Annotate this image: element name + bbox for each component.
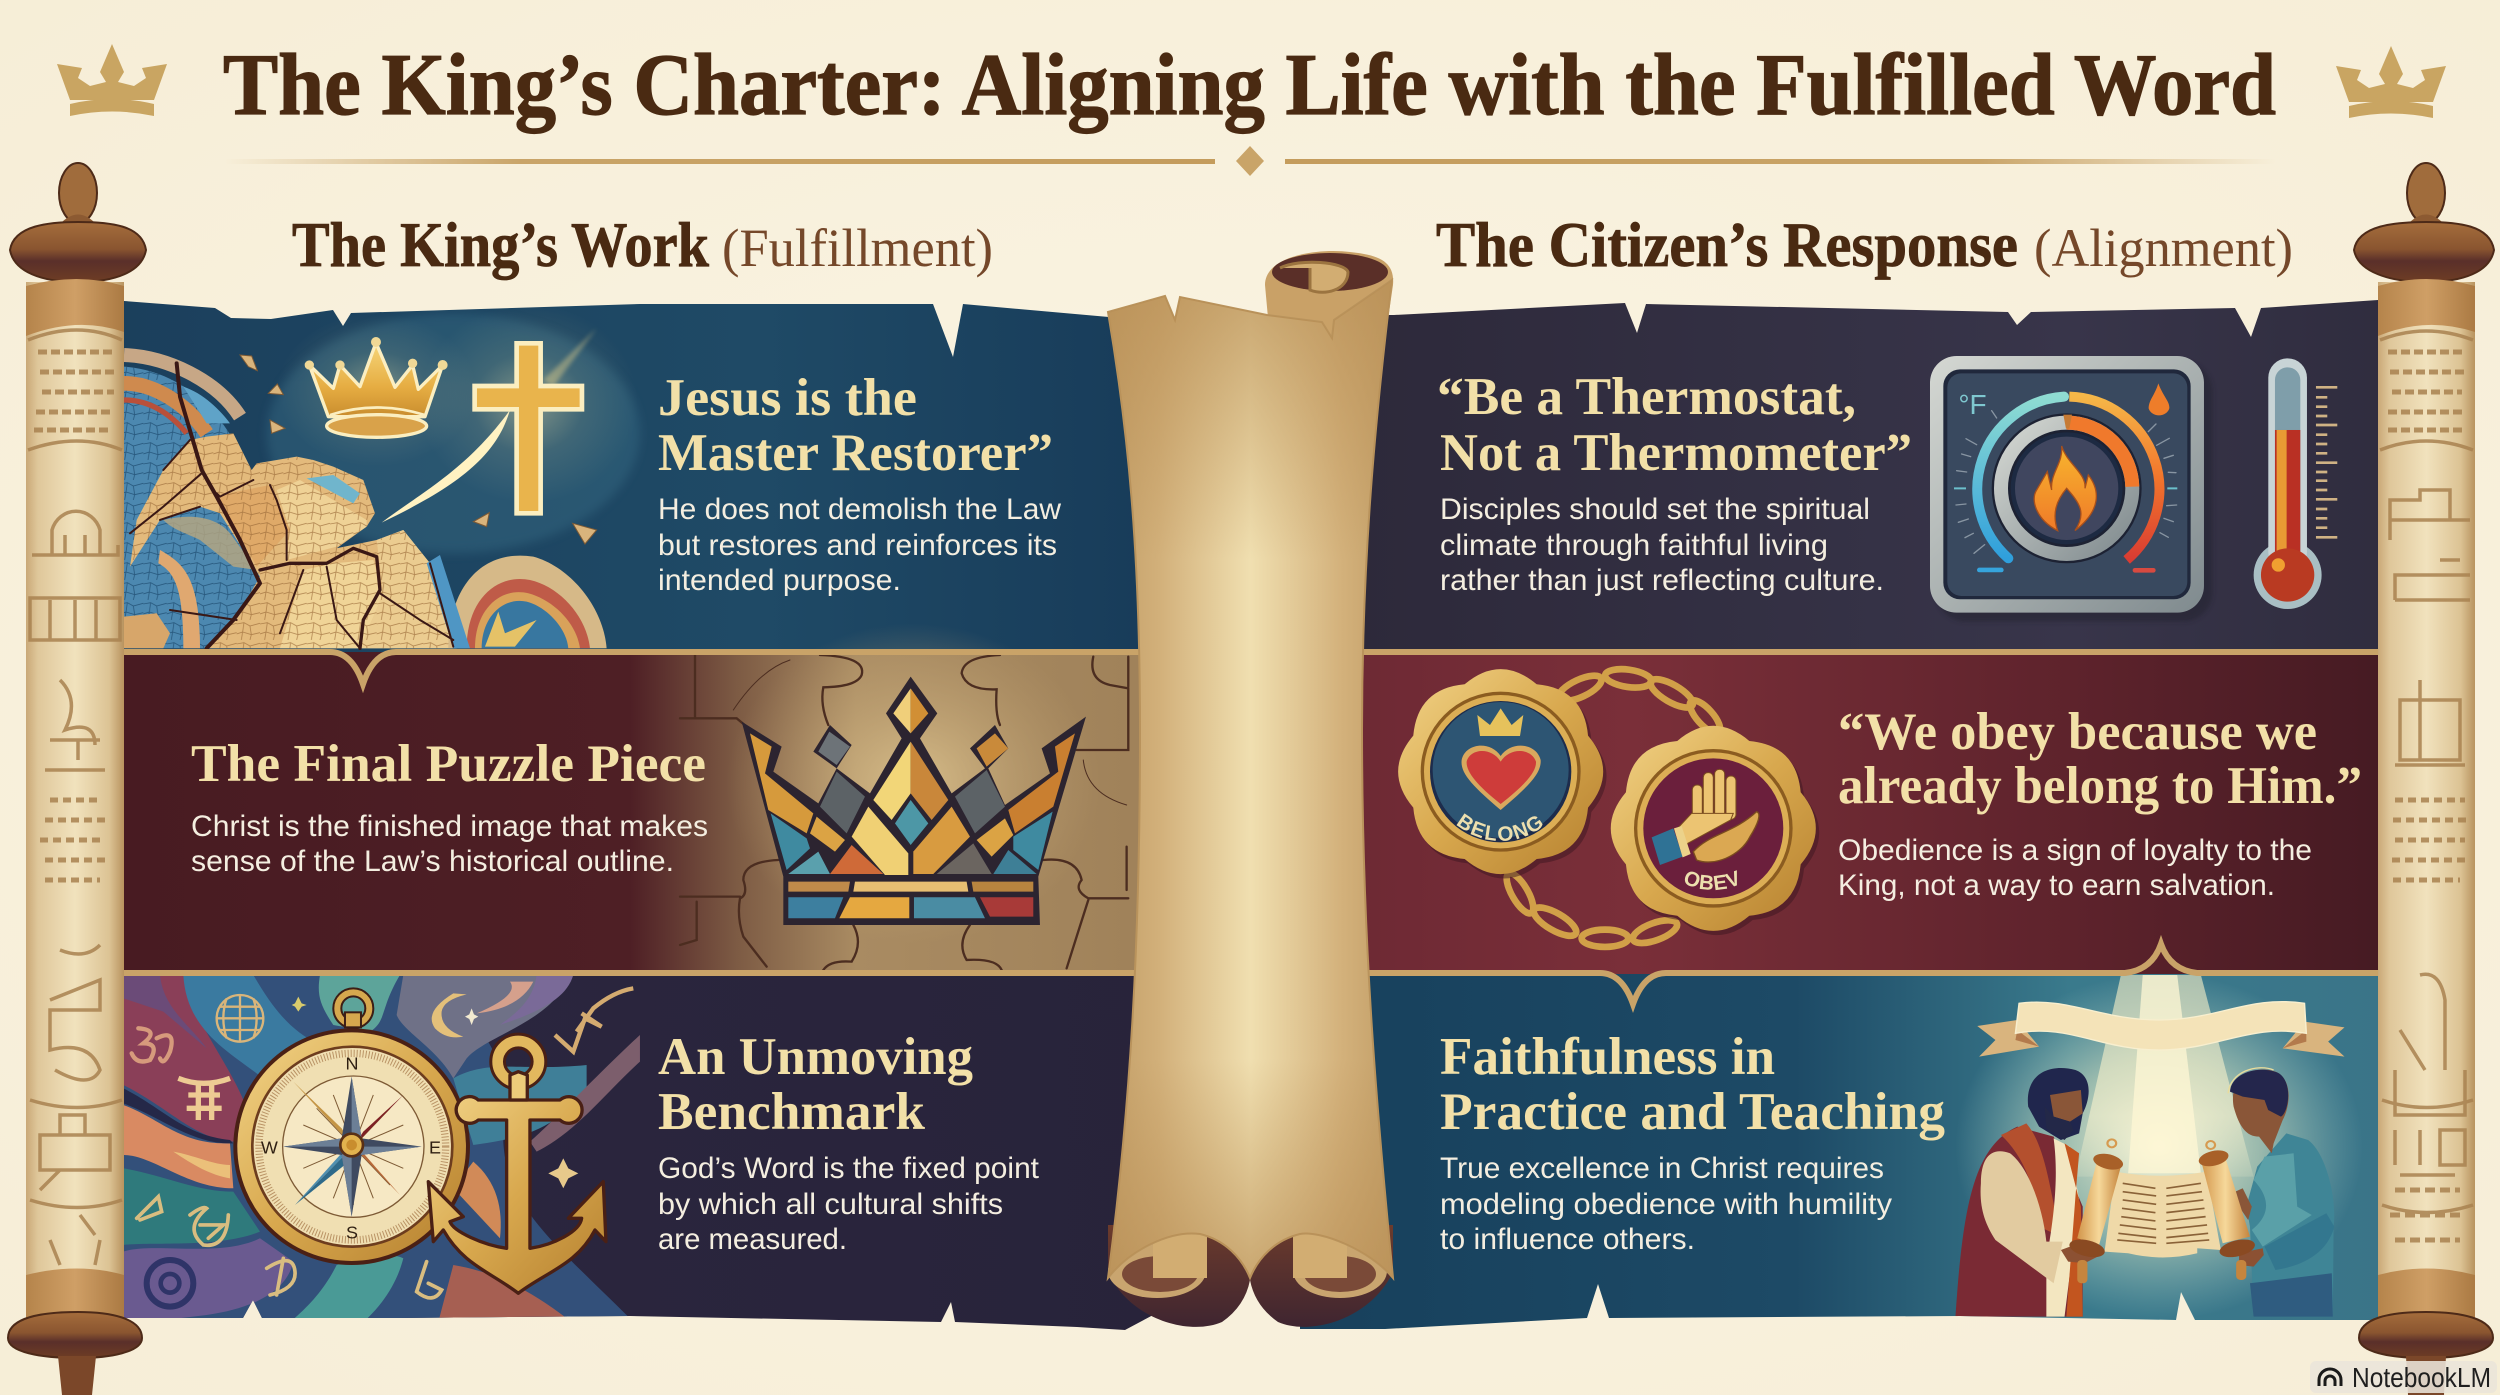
row background: we obey — [1300, 652, 2400, 974]
light streak — [382, 410, 510, 523]
right roller — [2354, 163, 2494, 1395]
body: intended purpose. — [658, 564, 901, 597]
column heading: the citizen's response: (Alignment) — [2034, 218, 2293, 278]
colored culture waves — [123, 975, 640, 1328]
bottom rolls — [1108, 1225, 1393, 1327]
shaft — [26, 282, 124, 1318]
text block: an unmoving benchmark — [658, 1028, 1040, 1256]
column heading: the king's work: (Fulfillment) — [722, 218, 993, 278]
illustration: thermostat and thermometer — [1930, 356, 2337, 622]
row background: final puzzle piece — [124, 652, 1200, 974]
left roller — [8, 163, 146, 1395]
seal: obey: OBEV — [1684, 870, 1737, 890]
body: Obedience is a sign of loyalty to the — [1838, 834, 2312, 867]
illustration: teacher and student with torah scroll — [1955, 973, 2363, 1320]
light beam — [2075, 975, 2254, 1177]
column heading: the king's work — [292, 210, 993, 280]
illustration: cracked mosaic with crown and cross — [124, 303, 640, 648]
title: The King’s Charter: Aligning Life with the Fulfilled Word — [223, 37, 2276, 134]
heading — [1437, 368, 1912, 482]
body — [658, 493, 1061, 597]
body — [1440, 1152, 1892, 1256]
heading — [658, 1028, 973, 1141]
illustration: compass and anchor on cultural waves — [123, 975, 640, 1328]
base band — [2378, 1268, 2475, 1318]
mosaic blue ground — [124, 367, 453, 648]
shaft — [2378, 282, 2475, 1318]
title crown right icon — [2336, 46, 2446, 118]
text block: jesus is the master restorer — [658, 369, 1061, 597]
heading — [658, 378, 1051, 471]
illustration: stained glass crown on puzzle wall — [680, 623, 1128, 970]
text block: the final puzzle piece — [191, 735, 708, 878]
body: rather than just reflecting culture. — [1440, 564, 1884, 597]
icon: thermometer — [2254, 358, 2337, 609]
heading: Faithfulness in — [1440, 1028, 1775, 1086]
panel: king's work banner — [100, 290, 1200, 1344]
seal: belong: BELONG — [1456, 813, 1542, 841]
body: are measured. — [658, 1223, 847, 1256]
mosaic lower right arch — [448, 556, 607, 648]
body — [191, 810, 708, 878]
row background: faithfulness — [1300, 974, 2400, 1344]
mosaic cracks — [177, 363, 260, 648]
heading — [1838, 703, 2362, 815]
capital band — [2378, 279, 2475, 336]
heading: already belong to Him.” — [1838, 757, 2362, 815]
text block: faithfulness — [1440, 1028, 1945, 1256]
body: by which all cultural shifts — [658, 1188, 1003, 1221]
body: Disciples should set the spiritual — [1440, 493, 1870, 526]
body: True excellence in Christ requires — [1440, 1152, 1884, 1185]
body: but restores and reinforces its — [658, 529, 1057, 562]
body: sense of the Law’s historical outline. — [191, 845, 674, 878]
text block: we obey — [1838, 703, 2362, 902]
icon: compass — [233, 992, 470, 1265]
finial — [2354, 163, 2494, 282]
figure: teacher — [1955, 1068, 2101, 1317]
row background: thermostat — [1300, 290, 2400, 652]
illustration: belong and obey seals with chain — [1363, 641, 1819, 988]
body — [658, 1152, 1040, 1256]
chain upper — [1555, 667, 1725, 737]
icon: glowing cross — [440, 321, 618, 516]
right row dividers — [1350, 652, 2380, 1004]
foot — [8, 1312, 142, 1395]
body: God’s Word is the fixed point — [658, 1152, 1040, 1185]
capital band — [26, 279, 124, 336]
body: to influence others. — [1440, 1223, 1695, 1256]
heading: “We obey because we — [1838, 703, 2317, 761]
body — [1440, 493, 1884, 597]
inscriptions — [2380, 331, 2473, 1240]
heading — [1440, 1028, 1945, 1141]
foot — [2359, 1312, 2493, 1395]
heading: Not a Thermometer” — [1440, 424, 1912, 482]
body: King, not a way to earn salvation. — [1838, 869, 2275, 902]
icon: glowing crown — [296, 328, 456, 452]
row background: master restorer — [124, 301, 1138, 652]
body — [1838, 834, 2312, 902]
icon: thermostat — [1930, 356, 2213, 622]
heading: Practice and Teaching — [1440, 1083, 1945, 1141]
mosaic arch bands — [124, 355, 240, 417]
spiral symbol — [147, 1260, 193, 1307]
row background: unmoving benchmark — [243, 976, 1152, 1330]
text block: be a thermostat — [1437, 368, 1912, 597]
heading: Jesus is the — [658, 369, 917, 427]
body: climate through faithful living — [1440, 529, 1828, 562]
heading: “Be a Thermostat, — [1437, 368, 1856, 426]
panel: citizen's response banner — [1300, 300, 2378, 1329]
floating shards — [240, 355, 597, 544]
seal: belong — [1398, 669, 1606, 878]
finial — [10, 163, 146, 282]
banner ribbon — [1977, 1002, 2345, 1057]
body: modeling obedience with humility — [1440, 1188, 1892, 1221]
title divider — [225, 146, 2275, 176]
icon: torah scroll — [2067, 1139, 2257, 1283]
icon: compass: W — [261, 1138, 278, 1158]
parchment sheet — [1108, 280, 1393, 1278]
column heading: the king's work: The King’s Work — [292, 210, 709, 280]
heading: The Final Puzzle Piece — [191, 735, 706, 793]
inscriptions — [28, 330, 122, 1265]
globe symbol — [217, 995, 263, 1042]
icon: compass: S — [346, 1222, 358, 1242]
chain lower — [1502, 870, 1680, 948]
mosaic tan mass — [130, 433, 457, 648]
heading: An Unmoving — [658, 1028, 973, 1086]
column heading: the citizen's response: The Citizen’s Response — [1436, 210, 2018, 280]
left row dividers — [124, 652, 1150, 973]
seal: obey — [1610, 726, 1819, 935]
title crown left icon — [57, 44, 167, 116]
heading: Master Restorer” — [658, 424, 1053, 482]
icon: compass: N — [345, 1054, 358, 1074]
heading: Benchmark — [658, 1083, 926, 1141]
body: He does not demolish the Law — [658, 493, 1061, 526]
sacred symbols — [132, 1028, 172, 1061]
body: Christ is the finished image that makes — [191, 810, 708, 843]
soft teal glow — [267, 313, 640, 553]
base band — [26, 1268, 124, 1318]
figure: student — [2228, 1068, 2334, 1317]
icon: anchor — [428, 1041, 606, 1293]
icon: compass: E — [429, 1138, 441, 1158]
center scroll — [1108, 251, 1393, 1327]
icon: thermostat: °F — [1958, 389, 1987, 420]
top roll — [1265, 251, 1393, 340]
